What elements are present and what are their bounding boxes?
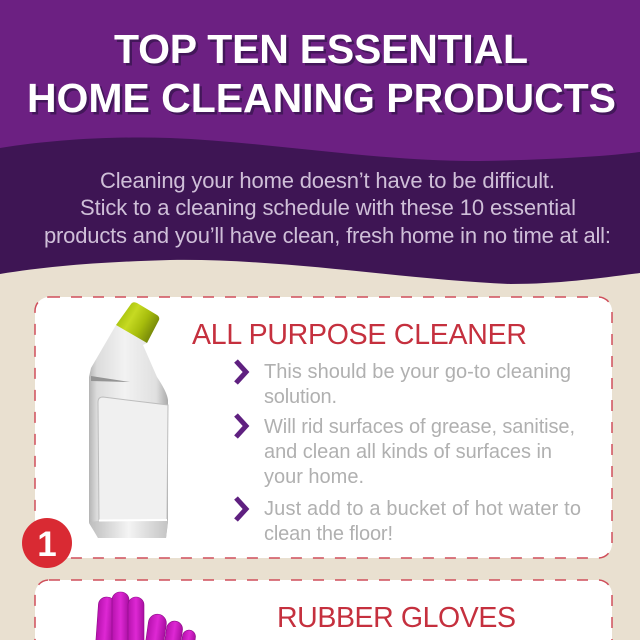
panel: rubber gloves bbox=[35, 580, 612, 640]
intro text: products and you’ll have clean, fresh home in no time at all: bbox=[44, 223, 611, 248]
bullet text: clean the floor! bbox=[264, 523, 393, 545]
number badge 1 bbox=[22, 518, 72, 568]
title: TOP TEN ESSENTIAL bbox=[116, 28, 530, 74]
card background bbox=[35, 580, 612, 640]
bullet icons bbox=[236, 361, 246, 520]
heading: rubber gloves: RUBBER GLOVES bbox=[277, 602, 516, 634]
bullet text: Will rid surfaces of grease, sanitise, bbox=[264, 416, 575, 438]
bullet text: and clean all kinds of surfaces in bbox=[264, 441, 552, 463]
bullet text: solution. bbox=[264, 386, 337, 408]
icon: cleaner bottle bbox=[89, 302, 168, 538]
intro wave band bbox=[0, 137, 640, 284]
title: HOME CLEANING PRODUCTS bbox=[27, 75, 616, 121]
number badge 1: 1 bbox=[37, 525, 57, 564]
intro text: Cleaning your home doesn’t have to be difficult. bbox=[100, 168, 555, 193]
card background bbox=[35, 297, 612, 558]
title bbox=[27, 26, 618, 124]
bullet text bbox=[264, 361, 581, 545]
panel: all purpose cleaner bbox=[22, 297, 612, 568]
header band bbox=[0, 0, 640, 175]
intro text bbox=[44, 168, 611, 248]
icon: rubber glove bbox=[95, 592, 196, 640]
bullet text: your home. bbox=[264, 466, 364, 488]
title: HOME CLEANING PRODUCTS bbox=[30, 78, 618, 124]
intro text: Stick to a cleaning schedule with these 10 essential bbox=[80, 195, 576, 220]
title: TOP TEN ESSENTIAL bbox=[114, 26, 528, 72]
bullet text: Just add to a bucket of hot water to bbox=[264, 498, 581, 520]
bullet text: This should be your go-to cleaning bbox=[264, 361, 571, 383]
heading: all purpose cleaner: ALL PURPOSE CLEANER bbox=[192, 319, 527, 351]
